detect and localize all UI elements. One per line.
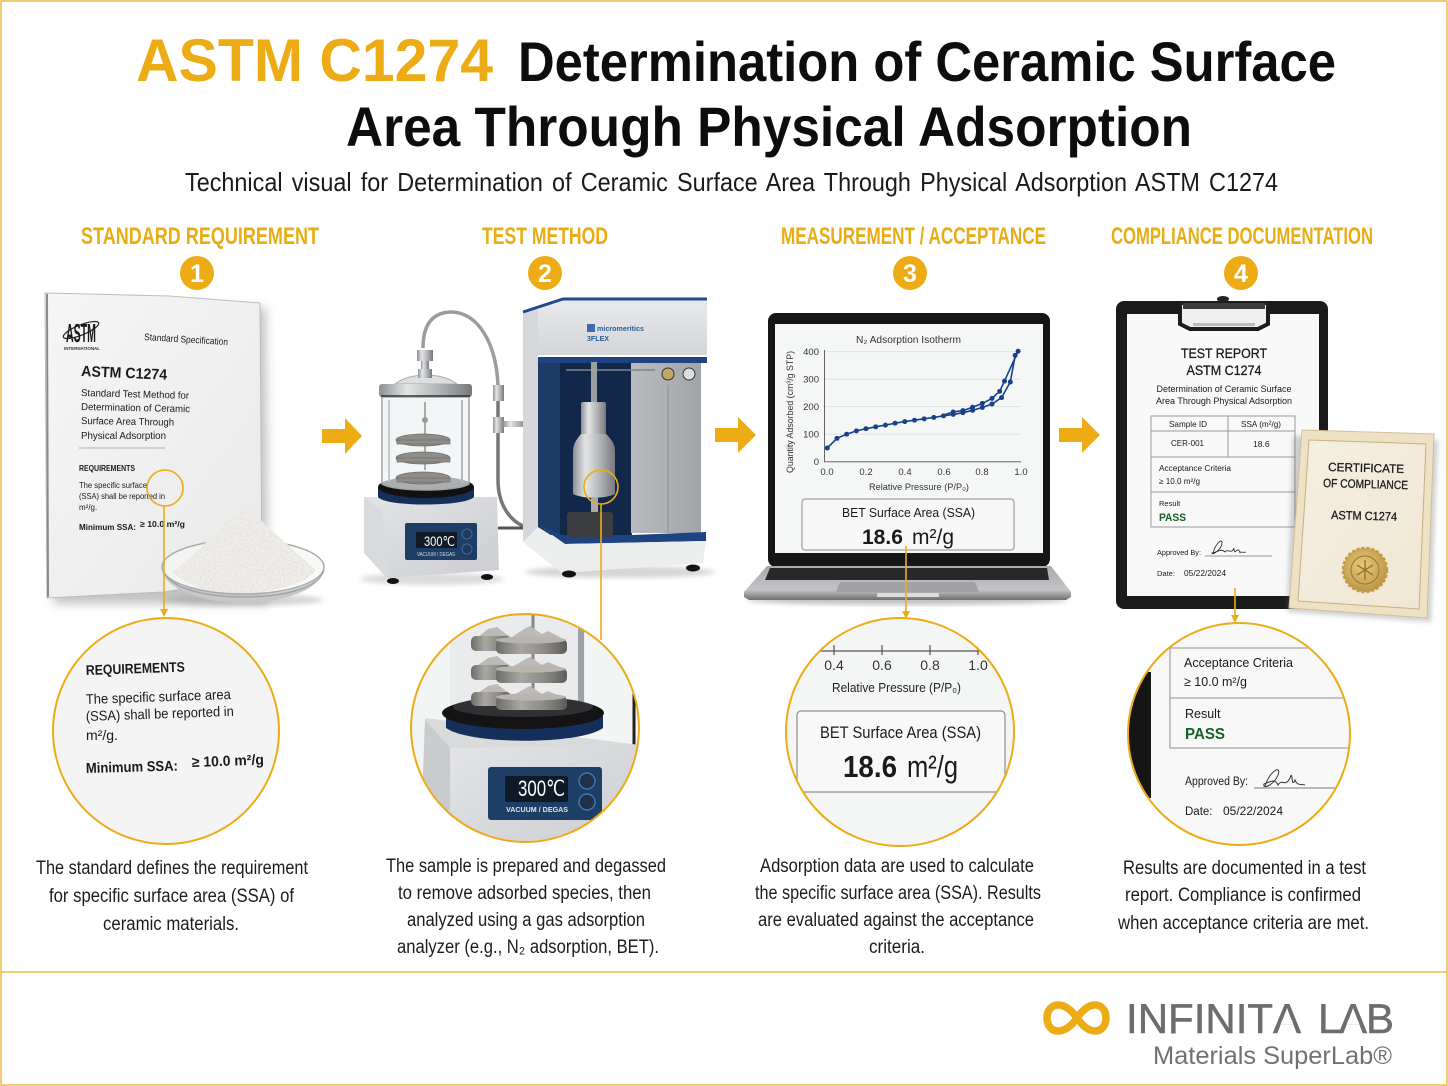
caption 4: report. Compliance is confirmed bbox=[1125, 885, 1361, 906]
wordmark: INFINITA LAB bbox=[1126, 995, 1394, 1042]
caption 1: The standard defines the requirement bbox=[36, 858, 309, 879]
isotherm chart bbox=[785, 335, 1028, 493]
clipboard test report: TEST REPORT bbox=[1181, 345, 1267, 361]
magnifier: BET result: 1.0 bbox=[968, 657, 988, 673]
magnifier: test report result: Acceptance Criteria bbox=[1184, 655, 1294, 670]
caption 3: criteria. bbox=[869, 937, 925, 958]
isotherm chart: 0.2 bbox=[859, 467, 873, 478]
small callout circle and connector bbox=[147, 470, 183, 617]
magnifier: test report result: Date: bbox=[1185, 806, 1212, 818]
magnifier: test report result bbox=[1128, 623, 1360, 845]
report table: SSA (m²/g) bbox=[1241, 419, 1281, 429]
caption 3: the specific surface area (SSA). Results bbox=[755, 883, 1041, 904]
certificate of compliance: OF COMPLIANCE bbox=[1323, 476, 1408, 492]
arrow 1 to 2 bbox=[322, 418, 362, 454]
report table: 18.6 bbox=[1253, 439, 1270, 449]
caption 2: analyzer (e.g., N₂ adsorption, BET). bbox=[397, 937, 659, 958]
magnifier: requirements: REQUIREMENTS bbox=[86, 659, 185, 678]
isotherm chart: 1.0 bbox=[1014, 467, 1028, 478]
magnifier: BET result: 0.6 bbox=[872, 657, 892, 673]
isotherm chart: N₂ Adsorption Isotherm bbox=[856, 335, 961, 346]
ASTM logo: INTERNATIONAL bbox=[64, 346, 100, 351]
caption 4: when acceptance criteria are met. bbox=[1117, 913, 1369, 934]
signature block: Date: bbox=[1157, 569, 1175, 578]
clipboard test report: Determination of Ceramic Surface bbox=[1156, 384, 1292, 395]
step number 1 bbox=[180, 256, 214, 290]
report table: CER-001 bbox=[1171, 438, 1204, 448]
isotherm chart: 0.8 bbox=[975, 467, 989, 478]
magnifier: BET result: 18.6 bbox=[843, 749, 897, 784]
title bbox=[136, 27, 1336, 158]
magnifier: test report result: Approved By: bbox=[1185, 776, 1248, 788]
report table: PASS bbox=[1159, 512, 1186, 524]
standard document: (SSA) shall be reported in bbox=[79, 492, 165, 501]
magnifier: BET result: 0.8 bbox=[920, 657, 940, 673]
standard document: REQUIREMENTS bbox=[79, 464, 136, 473]
caption 2: to remove adsorbed species, then bbox=[398, 883, 651, 904]
magnifier: requirements: The specific surface area bbox=[86, 686, 231, 707]
ASTM logo: ASTM bbox=[66, 319, 96, 348]
magnifier: BET result: 0.4 bbox=[824, 657, 844, 673]
connector bbox=[1231, 588, 1239, 623]
step number 1: 1 bbox=[190, 260, 204, 288]
magnifier: requirements: ≥ 10.0 m²/g bbox=[192, 752, 264, 771]
arrow 3 to 4 bbox=[1059, 417, 1100, 453]
magnifier: test report result: Result bbox=[1185, 707, 1221, 721]
caption 1: for specific surface area (SSA) of bbox=[49, 886, 295, 907]
magnifier: BET result: BET Surface Area (SSA) bbox=[820, 723, 981, 742]
caption 2: The sample is prepared and degassed bbox=[386, 856, 666, 877]
heading: standard requirement: STANDARD REQUIREMENT bbox=[81, 223, 319, 250]
panel: compliance documentation bbox=[1111, 223, 1438, 934]
caption 4: Results are documented in a test bbox=[1123, 858, 1367, 879]
heading: test method: TEST METHOD bbox=[482, 223, 608, 250]
caption 3: Adsorption data are used to calculate bbox=[760, 856, 1034, 877]
panel: measurement / acceptance bbox=[744, 223, 1071, 958]
report table: ≥ 10.0 m²/g bbox=[1159, 477, 1200, 486]
isotherm chart: 200 bbox=[803, 402, 819, 413]
analyzer brand: 3FLEX bbox=[587, 334, 609, 343]
clipboard test report: ASTM C1274 bbox=[1186, 362, 1262, 378]
standard document bbox=[45, 293, 268, 604]
logo: Infinita Lab bbox=[1047, 995, 1394, 1070]
panel: test method bbox=[360, 223, 715, 958]
caption 2 bbox=[386, 856, 666, 958]
report table: Sample ID bbox=[1169, 419, 1207, 429]
control panel: VACUUM / DEGAS bbox=[417, 552, 455, 558]
magnifier: requirements: Minimum SSA: bbox=[86, 759, 178, 777]
magnifier: requirements: m²/g. bbox=[86, 727, 118, 743]
report table bbox=[1151, 416, 1295, 527]
analyzer brand: micromeritics bbox=[597, 324, 644, 333]
panel: standard requirement bbox=[36, 223, 324, 935]
magnified control panel: VACUUM / DEGAS bbox=[506, 805, 568, 814]
isotherm chart: 400 bbox=[803, 347, 819, 358]
magnified sample trays bbox=[471, 626, 567, 710]
BET result box: m²/g bbox=[912, 526, 954, 549]
caption 1 bbox=[36, 858, 309, 935]
standard document: The specific surface bbox=[79, 481, 148, 490]
gold seal bbox=[1343, 548, 1387, 592]
step number 4 bbox=[1224, 256, 1258, 290]
signature block bbox=[1157, 541, 1272, 578]
standard document: Minimum SSA: bbox=[79, 522, 136, 532]
standard document: ASTM C1274 bbox=[81, 363, 168, 384]
gas adsorption analyzer bbox=[523, 299, 715, 578]
magnifier: requirements: (SSA) shall be reported in bbox=[86, 703, 234, 724]
caption 4 bbox=[1117, 858, 1369, 934]
analyzer brand bbox=[587, 324, 644, 343]
standard document: m²/g. bbox=[79, 503, 97, 512]
icon: infinity bbox=[1047, 1005, 1106, 1031]
BET result box: 18.6 bbox=[862, 526, 903, 549]
magnified control panel: 300℃ bbox=[518, 776, 565, 801]
isotherm chart: 300 bbox=[803, 374, 819, 386]
isotherm chart: 0.6 bbox=[937, 467, 951, 478]
caption 3: are evaluated against the acceptance bbox=[758, 910, 1034, 931]
step number 2: 2 bbox=[538, 260, 552, 288]
small callout circle and connector bbox=[584, 470, 618, 640]
standard document: Physical Adsorption bbox=[81, 431, 166, 442]
title: Area Through Physical Adsorption bbox=[346, 95, 1192, 158]
control panel bbox=[405, 523, 477, 560]
subtitle: Technical visual for Determination of Ceramic Surface Area Through Physical Adsorption ASTM C1274 bbox=[185, 167, 1278, 197]
magnifier: requirements bbox=[53, 618, 279, 844]
isotherm chart: 0.0 bbox=[820, 467, 834, 478]
caption 2: analyzed using a gas adsorption bbox=[407, 910, 645, 931]
isotherm chart: 100 bbox=[803, 430, 819, 440]
step number 3: 3 bbox=[903, 260, 917, 288]
report table: Acceptance Criteria bbox=[1159, 464, 1232, 473]
step number 3 bbox=[893, 256, 927, 290]
standard document: Standard Specification bbox=[144, 332, 228, 348]
standard document: ≥ 10.0 m²/g bbox=[140, 519, 185, 529]
clipboard test report: Area Through Physical Adsorption bbox=[1156, 396, 1292, 407]
certificate of compliance: ASTM C1274 bbox=[1331, 508, 1398, 524]
BET result box: BET Surface Area (SSA) bbox=[842, 506, 975, 520]
isotherm chart: 0.4 bbox=[898, 467, 912, 478]
arrow 2 to 3 bbox=[715, 417, 756, 453]
report table: Result bbox=[1159, 499, 1181, 508]
isotherm chart: Relative Pressure (P/P₀) bbox=[869, 482, 969, 493]
magnified control panel bbox=[488, 767, 602, 820]
magnifier: BET result: m²/g bbox=[907, 749, 958, 784]
step number 4: 4 bbox=[1234, 260, 1248, 288]
magnifier: test report result: PASS bbox=[1185, 726, 1225, 743]
connector bbox=[902, 546, 910, 619]
signature block: Approved By: bbox=[1157, 548, 1201, 557]
title: Determination of Ceramic Surface bbox=[518, 30, 1336, 93]
laptop bbox=[744, 313, 1071, 605]
magnifier: BET result: Relative Pressure (P/P₀) bbox=[832, 680, 961, 695]
control panel: 300℃ bbox=[424, 533, 455, 549]
magnifier: test report result: 05/22/2024 bbox=[1223, 804, 1283, 818]
magnifier: test report result: ≥ 10.0 m²/g bbox=[1184, 674, 1247, 689]
degas chamber unit bbox=[360, 312, 531, 585]
certificate of compliance: CERTIFICATE bbox=[1328, 460, 1404, 476]
certificate of compliance bbox=[1287, 430, 1438, 622]
caption 1: ceramic materials. bbox=[103, 914, 239, 935]
isotherm chart: 0 bbox=[814, 457, 819, 468]
caption 3 bbox=[755, 856, 1041, 958]
magnifier: degas chamber bbox=[411, 610, 640, 850]
BET result box bbox=[802, 499, 1014, 550]
standard document: Surface Area Through bbox=[81, 416, 174, 429]
tagline: Materials SuperLab® bbox=[1153, 1042, 1393, 1070]
heading: measurement / acceptance: MEASUREMENT / ACCEPTANCE bbox=[781, 223, 1046, 250]
standard document: Determination of Ceramic bbox=[81, 402, 190, 415]
magnifier: BET result bbox=[780, 618, 1020, 846]
powder dish bbox=[162, 511, 324, 606]
isotherm chart: Quantity Adsorbed (cm³/g STP) bbox=[785, 351, 795, 473]
standard document: Standard Test Method for bbox=[81, 388, 190, 402]
signature block: 05/22/2024 bbox=[1184, 569, 1227, 578]
title: ASTM C1274 bbox=[136, 27, 494, 94]
clipboard test report bbox=[1116, 296, 1328, 609]
step number 2 bbox=[528, 256, 562, 290]
